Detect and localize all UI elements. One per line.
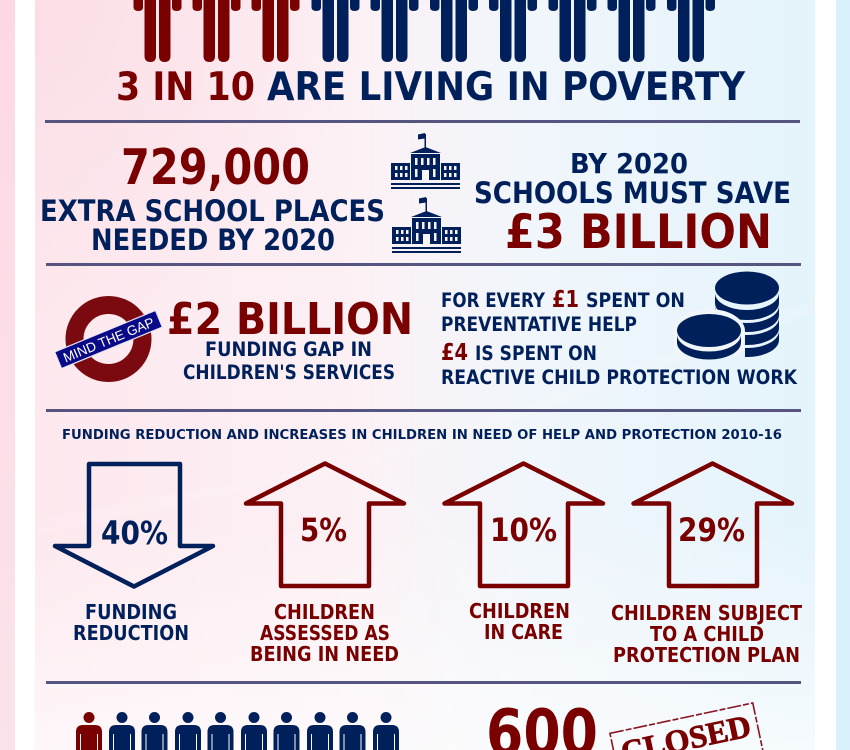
icon: coins [673,272,779,360]
panel: school savings: BY 2020 [570,147,688,180]
label: children assessed: CHILDREN [274,600,375,624]
panel: school places: NEEDED BY 2020 [91,223,335,257]
panel: school savings: £3 BILLION [505,205,772,260]
arrow: 29% [634,464,792,586]
panel: preventative spending: £4 [441,340,468,366]
label: children in care [469,599,570,644]
panel: school places [40,139,385,257]
arrow: funding reduction 40% [55,464,213,586]
panel: preventative spending: SPENT ON [586,289,685,312]
arrow: 5% [246,464,404,586]
arrow: 5%: 5% [300,511,347,549]
panel: preventative spending: REACTIVE CHILD PROTECTION WORK [441,366,798,389]
panel: funding gap: CHILDREN'S SERVICES [183,361,395,384]
label: children assessed: ASSESSED AS [260,621,390,645]
panel: preventative spending [441,287,798,389]
arrow: 10%: 10% [490,511,557,549]
panel: preventative spending: IS SPENT ON [475,342,597,365]
arrow: 10% [444,464,603,586]
label: funding reduction [73,600,189,645]
icon: row of ten people, three red [134,0,715,62]
icon: row of ten people, one red [76,712,399,750]
title: 3 IN 10 [116,65,255,110]
icon: mind the gap roundel: MIND THE GAP [61,315,156,365]
panel: school places: 729,000 [121,139,310,196]
panel: funding gap: £2 BILLION [167,294,413,345]
label: funding reduction: REDUCTION [73,621,189,645]
label: funding reduction: FUNDING [85,600,177,624]
title: ARE LIVING IN POVERTY [267,65,746,110]
label: child protection plan: CHILDREN SUBJECT [611,601,802,625]
label: children assessed: BEING IN NEED [250,642,399,666]
label: children in care: IN CARE [484,620,563,644]
panel: preventative spending: FOR EVERY [441,289,546,312]
panel: preventative spending: £1 [552,287,579,313]
label: child protection plan: TO A CHILD [650,622,764,646]
icon: mind the gap roundel [55,305,162,373]
label: children in care: CHILDREN [469,599,570,623]
panel: school places: EXTRA SCHOOL PLACES [40,194,385,228]
arrow: funding reduction 40%: 40% [101,514,168,552]
panel: preventative spending: PREVENTATIVE HELP [441,313,637,336]
icon: schools [391,133,461,253]
heading: funding reduction: FUNDING REDUCTION AND INCREASES IN CHILDREN IN NEED OF HELP AND PROTECTION 2010-16 [62,428,782,443]
panel: school savings: SCHOOLS MUST SAVE [474,176,791,210]
panel: funding gap [167,294,413,384]
label: child protection plan [611,601,802,667]
arrow: 29%: 29% [678,511,745,549]
label: child protection plan: PROTECTION PLAN [613,643,800,667]
label: children assessed [250,600,399,666]
panel: school savings [474,147,791,260]
panel: funding gap: FUNDING GAP IN [205,338,372,361]
